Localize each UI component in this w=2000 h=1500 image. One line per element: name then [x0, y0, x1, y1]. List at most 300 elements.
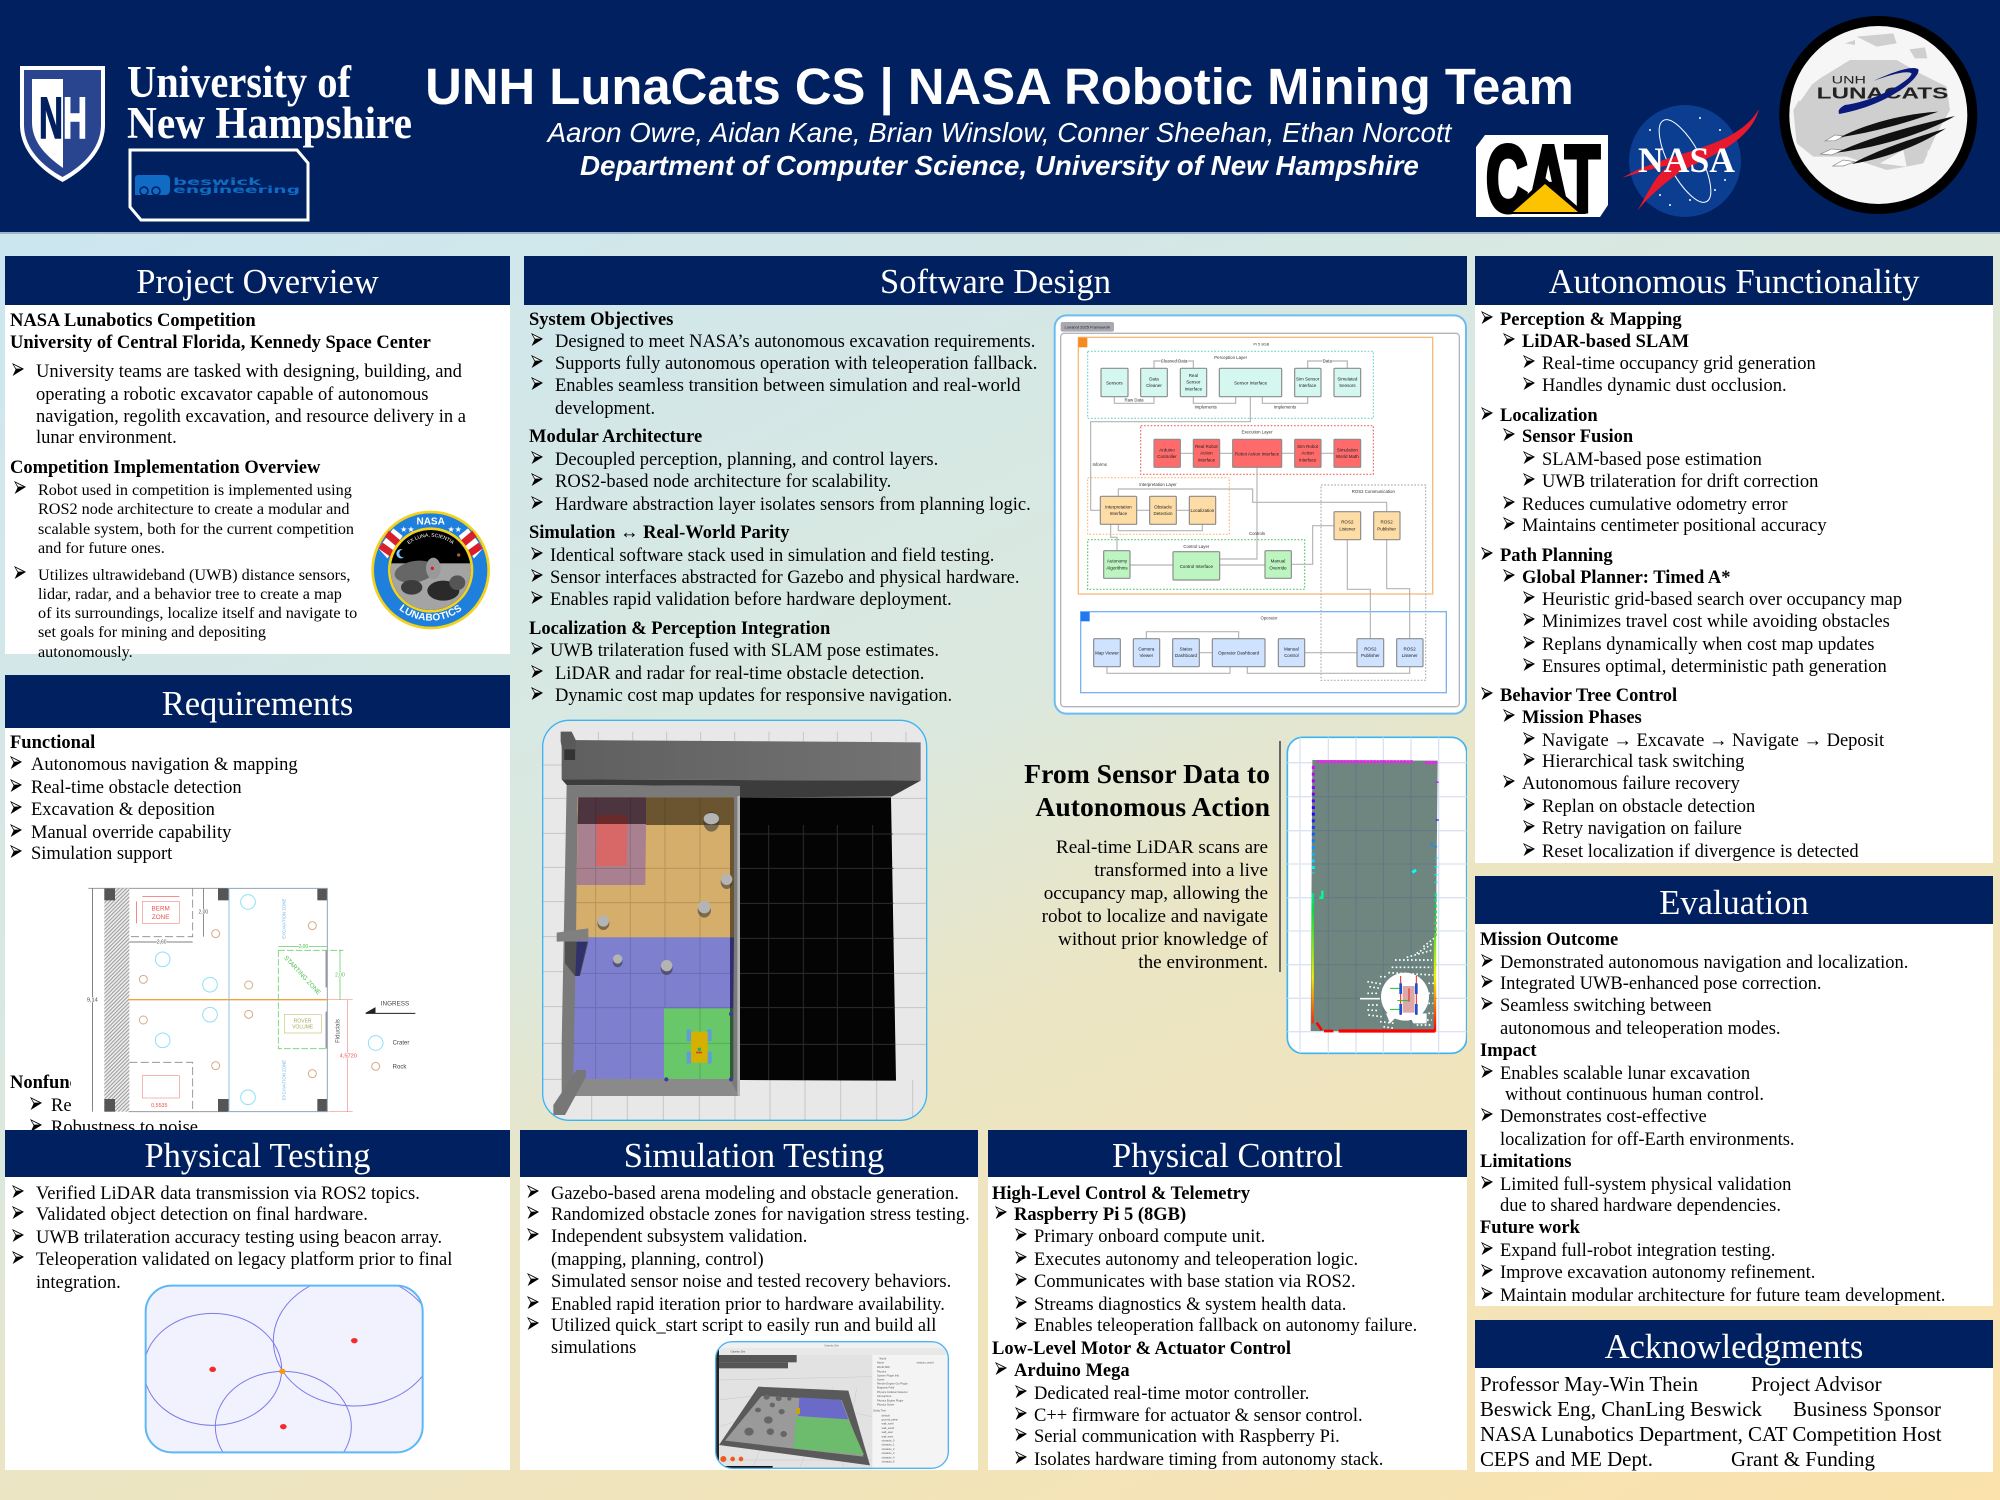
- diagram: software architecture: ROS2: [1381, 520, 1393, 525]
- text: evaluation: Expand full-robot integration testing.: [1500, 1241, 1775, 1261]
- text: autonomous functionality: Sensor Fusion: [1522, 427, 1633, 447]
- diagram: software architecture: Simulated: [1337, 376, 1358, 381]
- callout heading: Autonomous Action: [1035, 791, 1270, 822]
- text: physical control: Primary onboard compute unit.: [1034, 1227, 1265, 1247]
- logo: Beswick Engineering: [130, 150, 308, 220]
- render: Gazebo Sim screenshot: wall_east: [882, 1430, 893, 1434]
- heading: project overview: [5, 256, 510, 305]
- header banner: [0, 0, 2000, 234]
- callout text: the environment.: [1138, 952, 1268, 973]
- text: autonomous functionality: Minimizes travel cost while avoiding obstacles: [1542, 612, 1890, 632]
- heading: acknowledgments: Acknowledgments: [1605, 1328, 1863, 1366]
- text: evaluation: without continuous human control.: [1505, 1085, 1764, 1105]
- diagram: software architecture: Interface: [1299, 383, 1317, 388]
- diagram: software architecture: Lunabot 2025 Framework: [1065, 324, 1110, 329]
- text: evaluation: Demonstrates cost-effective: [1500, 1107, 1707, 1127]
- University of New Hampshire wordmark: University of: [127, 57, 352, 107]
- heading: project overview: Project Overview: [136, 263, 379, 301]
- render: Gazebo Sim screenshot: obstacle_3: [882, 1451, 895, 1455]
- diagram: software architecture: Action: [1301, 451, 1314, 456]
- diagram: software architecture: Control: [1284, 653, 1299, 658]
- text: autonomous functionality: Behavior Tree Control: [1500, 686, 1677, 706]
- diagram: software architecture: Sim Robot: [1297, 444, 1319, 449]
- text: simulation testing: Independent subsystem validation.: [551, 1227, 807, 1247]
- diagram: arena layout: 2,00: [198, 910, 208, 916]
- diagram: software architecture: Simulation: [1337, 447, 1358, 452]
- text: requirements: [10, 733, 298, 1130]
- logo: UNH LunaCats: [1779, 16, 1977, 214]
- render: Gazebo Sim screenshot: Render Engine Gui Plugin: [877, 1382, 908, 1386]
- text: requirements: Autonomous navigation & mapping: [31, 755, 298, 775]
- icon: NASA Lunabotics mission patch: NASA: [416, 517, 445, 528]
- diagram: software architecture: [1054, 314, 1467, 715]
- text: acknowledgments: Project Advisor: [1751, 1372, 1882, 1396]
- text: acknowledgments: Business Sponsor: [1793, 1397, 1941, 1421]
- text: acknowledgments: Professor May-Win Thein: [1480, 1372, 1698, 1396]
- panel: physical testing: [5, 1130, 510, 1470]
- render: Gazebo Sim screenshot: Physics Engine Plugin: [877, 1398, 904, 1402]
- text: requirements: Reliability: [51, 1096, 129, 1116]
- diagram: software architecture: Status: [1180, 646, 1193, 651]
- text: physical control: Executes autonomy and teleoperation logic.: [1034, 1250, 1358, 1270]
- diagram: arena layout: ZONE: [152, 914, 169, 921]
- department: Department of Computer Science, University of New Hampshire: [580, 150, 1419, 181]
- panel: acknowledgments: [1475, 1320, 1993, 1472]
- diagram: arena layout: BERM: [152, 905, 170, 912]
- render: Gazebo Sim screenshot: Physics: [877, 1369, 887, 1373]
- text: physical testing: Verified LiDAR data transmission via ROS2 topics.: [36, 1184, 420, 1204]
- icon: UNH shield: H: [63, 86, 87, 151]
- callout heading: [1024, 758, 1270, 822]
- text: physical control: [992, 1184, 1417, 1470]
- text: software design: Enables seamless transition between simulation and real-world: [555, 376, 1020, 396]
- render: Gazebo Sim screenshot: Gazebo Sim: [824, 1343, 840, 1347]
- callout text: occupancy map, allowing the: [1044, 883, 1268, 904]
- diagram: software architecture: Controls: [1249, 531, 1265, 536]
- icon: UNH shield: N: [39, 86, 63, 151]
- diagram: software architecture: Viewer: [1139, 653, 1154, 658]
- text: physical testing: Teleoperation validated on legacy platform prior to final: [36, 1250, 452, 1270]
- text: simulation testing: Gazebo-based arena modeling and obstacle generation.: [551, 1184, 959, 1204]
- heading: simulation testing: Simulation Testing: [624, 1137, 884, 1175]
- text: autonomous functionality: Maintains centimeter positional accuracy: [1522, 516, 1827, 536]
- diagram: arena layout: 2,00: [298, 944, 308, 950]
- render: Gazebo Sim screenshot: default: [882, 1413, 890, 1417]
- text: software design: Dynamic cost map updates for responsive navigation.: [555, 686, 952, 706]
- diagram: software architecture: Implements: [1274, 405, 1296, 410]
- render: Gazebo Sim screenshot: obstacle_5: [882, 1459, 895, 1463]
- text: software design: Hardware abstraction layer isolates sensors from planning logic.: [555, 495, 1031, 515]
- text: physical control: Dedicated real-time motor controller.: [1034, 1384, 1309, 1404]
- render: Gazebo Sim screenshot: obstacle_0: [882, 1439, 895, 1443]
- text: autonomous functionality: LiDAR-based SLAM: [1522, 332, 1689, 352]
- text: autonomous functionality: Global Planner: Timed A*: [1522, 568, 1730, 588]
- diagram: arena layout: VOLUME: [292, 1025, 314, 1031]
- text: project overview: operating a robotic excavator capable of autonomous: [36, 385, 428, 405]
- diagram: software architecture: Real Robot: [1195, 444, 1218, 449]
- text: evaluation: Maintain modular architecture for future team development.: [1500, 1286, 1945, 1306]
- diagram: arena layout: STARTING ZONE: [282, 955, 322, 997]
- callout text: robot to localize and navigate: [1042, 906, 1268, 927]
- text: evaluation: Impact: [1480, 1041, 1537, 1061]
- callout text: without prior knowledge of: [1058, 929, 1268, 950]
- diagram: arena layout: INGRESS: [381, 1001, 409, 1008]
- diagram: software architecture: Data: [1149, 376, 1159, 381]
- diagram: arena layout: [71, 872, 421, 1115]
- text: autonomous functionality: Reset localization if divergence is detected: [1542, 842, 1859, 862]
- diagram: arena layout: 9,14: [87, 997, 98, 1003]
- diagram: software architecture: Interface: [1198, 458, 1216, 463]
- text: evaluation: Enables scalable lunar excavation: [1500, 1064, 1750, 1084]
- heading: simulation testing: [520, 1130, 978, 1177]
- render: Gazebo Sim screenshot: obstacle_4: [882, 1455, 895, 1459]
- heading: software design: Software Design: [880, 263, 1111, 301]
- diagram: arena layout: EXCAVATION ZONE: [281, 898, 286, 939]
- text: physical control: Serial communication with Raspberry Pi.: [1034, 1427, 1340, 1447]
- heading: evaluation: [1475, 876, 1993, 924]
- text: physical control: Raspberry Pi 5 (8GB): [1014, 1205, 1186, 1225]
- text: software design: development.: [555, 399, 655, 419]
- text: physical testing: [12, 1184, 452, 1293]
- text: project overview: [10, 311, 466, 661]
- text: evaluation: Integrated UWB-enhanced pose correction.: [1500, 974, 1822, 994]
- diagram: arena layout: 4,5720: [340, 1054, 357, 1060]
- text: autonomous functionality: Autonomous failure recovery: [1522, 774, 1740, 794]
- text: software design: Designed to meet NASA’s autonomous excavation requirements.: [555, 332, 1035, 352]
- logo: CAT: CAT: [1486, 126, 1600, 231]
- callout text: Real-time LiDAR scans are: [1056, 837, 1268, 858]
- render: Gazebo Sim screenshot: ground_plane: [882, 1418, 898, 1422]
- icon: UNH shield: [20, 66, 105, 182]
- text: project overview: autonomously.: [38, 643, 133, 661]
- render: Gazebo Sim screenshot: wall_west: [882, 1434, 893, 1438]
- text: autonomous functionality: UWB trilateration for drift correction: [1542, 472, 1818, 492]
- text: autonomous functionality: Retry navigation on failure: [1542, 819, 1742, 839]
- text: physical testing: integration.: [36, 1273, 121, 1293]
- heading: autonomous functionality: [1475, 256, 1993, 305]
- text: software design: Localization & Perception Integration: [529, 619, 830, 639]
- render: Gazebo Sim screenshot: Scene: [877, 1377, 885, 1381]
- text: simulation testing: simulations: [551, 1338, 636, 1358]
- diagram: arena layout: EXCAVATION ZONE: [281, 1060, 286, 1100]
- render: Gazebo Sim screenshot: [715, 1341, 949, 1469]
- diagram: software architecture: Detection: [1153, 511, 1173, 516]
- heading: physical control: Physical Control: [1112, 1137, 1343, 1175]
- diagram: software architecture: Map Viewer: [1095, 650, 1119, 655]
- diagram: software architecture: Obstacle: [1154, 504, 1172, 509]
- render: Gazebo Sim screenshot: System Plugin Info: [877, 1373, 900, 1377]
- render: Gazebo Sim screenshot: World: [879, 1356, 887, 1360]
- text: physical control: Enables teleoperation fallback on autonomy failure.: [1034, 1316, 1417, 1336]
- text: software design: System Objectives: [529, 310, 673, 330]
- text: autonomous functionality: Heuristic grid-based search over occupancy map: [1542, 590, 1902, 610]
- diagram: software architecture: Override: [1269, 565, 1287, 570]
- text: autonomous functionality: Hierarchical task switching: [1542, 752, 1744, 772]
- text: evaluation: localization for off-Earth environments.: [1500, 1130, 1795, 1150]
- diagram: software architecture: Sim Sensor: [1296, 376, 1320, 381]
- text: project overview: lunar environment.: [36, 428, 177, 448]
- diagram: software architecture: Arduino: [1159, 447, 1175, 452]
- text: autonomous functionality: SLAM-based pose estimation: [1542, 450, 1762, 470]
- render: Gazebo Sim screenshot: Magnetic Field: [877, 1386, 895, 1390]
- panel: autonomous functionality: [1475, 256, 1993, 863]
- text: physical control: Arduino Mega: [1014, 1361, 1130, 1381]
- diagram: software architecture: Sensor Interface: [1234, 380, 1268, 385]
- render: Gazebo Sim screenshot: obstacle_1: [882, 1443, 895, 1447]
- text: acknowledgments: Beswick Eng, ChanLing Beswick: [1480, 1397, 1762, 1421]
- diagram: software architecture: Control Layer: [1183, 544, 1210, 549]
- text: simulation testing: Simulated sensor noise and tested recovery behaviors.: [551, 1272, 951, 1292]
- render: Gazebo Sim screenshot: Physics Solver: [877, 1403, 895, 1407]
- diagram: software architecture: Localization: [1190, 508, 1215, 513]
- heading: evaluation: Evaluation: [1659, 884, 1809, 922]
- logo: Beswick Engineering: beswick: [173, 177, 262, 188]
- text: software design: ROS2-based node architecture for scalability.: [555, 472, 891, 492]
- panel: software design: [524, 256, 1467, 1121]
- diagram: software architecture: Autonomy: [1107, 559, 1128, 564]
- diagram: software architecture: Perception Layer: [1214, 355, 1248, 360]
- panel: physical control: [988, 1130, 1467, 1470]
- diagram: software architecture: World Math: [1336, 454, 1359, 459]
- text: physical control: C++ firmware for actuator & sensor control.: [1034, 1406, 1363, 1426]
- panel: project overview: [5, 256, 510, 661]
- text: software design: Modular Architecture: [529, 427, 702, 447]
- text: physical control: Streams diagnostics & system health data.: [1034, 1295, 1346, 1315]
- text: project overview: Robot used in competition is implemented using: [38, 481, 352, 499]
- authors: Aaron Owre, Aidan Kane, Brian Winslow, Conner Sheehan, Ethan Norcott: [548, 117, 1451, 148]
- text: project overview: University teams are tasked with designing, building, and: [36, 362, 462, 382]
- callout text: transformed into a live: [1094, 860, 1268, 881]
- diagram: arena layout: Rock: [393, 1065, 407, 1071]
- text: project overview: scalable system, both for the current competition: [38, 520, 354, 538]
- diagram: software architecture: Listener: [1402, 653, 1418, 658]
- diagram: software architecture: Interface: [1185, 387, 1203, 392]
- render: Gazebo arena top view: [542, 720, 928, 1121]
- text: autonomous functionality: Real-time occupancy grid generation: [1542, 354, 1816, 374]
- callout text: [1042, 837, 1268, 973]
- text: evaluation: [1480, 930, 1945, 1306]
- text: acknowledgments: NASA Lunabotics Department, CAT Competition Host: [1480, 1422, 1942, 1446]
- diagram: software architecture: Camera: [1138, 646, 1155, 651]
- text: physical testing: Validated object detection on final hardware.: [36, 1205, 368, 1225]
- text: evaluation: Limitations: [1480, 1152, 1571, 1172]
- text: autonomous functionality: Replan on obstacle detection: [1542, 797, 1755, 817]
- diagram: software architecture: ROS2: [1404, 646, 1416, 651]
- logo: UNH LunaCats: LUNACATS: [1817, 85, 1948, 102]
- diagram: software architecture: Operator: [1260, 616, 1278, 621]
- diagram: software architecture: Data: [1323, 359, 1332, 364]
- text: evaluation: Seamless switching between: [1500, 996, 1712, 1016]
- render: Gazebo Sim screenshot: wall_south: [882, 1426, 895, 1430]
- diagram: software architecture: Robot Action Interface: [1235, 451, 1280, 456]
- render: Gazebo Sim screenshot: World SDF: [877, 1365, 890, 1369]
- text: project overview: ROS2 node architecture to create a modular and: [38, 500, 349, 518]
- diagram: software architecture: Manual: [1284, 646, 1299, 651]
- diagram: software architecture: Algorithms: [1106, 565, 1128, 570]
- logo: UNH LunaCats: UNH: [1832, 74, 1866, 86]
- title: UNH LunaCats CS | NASA Robotic Mining Team: [425, 58, 1574, 115]
- text: software design: UWB trilateration fused with SLAM pose estimates.: [550, 641, 939, 661]
- diagram: arena layout: Crater: [393, 1041, 409, 1047]
- diagram: software architecture: Dashboard: [1175, 653, 1198, 658]
- text: acknowledgments: Grant & Funding: [1731, 1447, 1875, 1471]
- text: evaluation: Demonstrated autonomous navigation and localization.: [1500, 953, 1908, 973]
- University of New Hampshire wordmark: [127, 57, 412, 148]
- text: autonomous functionality: [1481, 310, 1902, 862]
- text: physical control: High-Level Control & Telemetry: [992, 1184, 1250, 1204]
- text: physical control: Communicates with base station via ROS2.: [1034, 1272, 1356, 1292]
- render: Gazebo Sim screenshot: obstacle_2: [882, 1447, 895, 1451]
- render: Gazebo Sim screenshot: wall_north: [882, 1422, 894, 1426]
- diagram: software architecture: Sensors: [1339, 383, 1356, 388]
- heading: requirements: Requirements: [162, 685, 353, 723]
- text: evaluation: Improve excavation autonomy refinement.: [1500, 1263, 1815, 1283]
- diagram: software architecture: Real: [1189, 373, 1198, 378]
- diagram: software architecture: Pi 5 8GB: [1253, 341, 1270, 346]
- callout: from sensor data to autonomous action: [1024, 758, 1270, 973]
- callout heading: From Sensor Data to: [1024, 758, 1270, 789]
- diagram: software architecture: Sensor: [1186, 380, 1201, 385]
- diagram: software architecture: Interface: [1110, 511, 1128, 516]
- render: Gazebo Sim screenshot: Gazebo Sim: [731, 1349, 746, 1353]
- text: simulation testing: Randomized obstacle zones for navigation stress testing.: [551, 1205, 970, 1225]
- diagram: software architecture: Action: [1200, 451, 1213, 456]
- heading: physical testing: [5, 1130, 510, 1177]
- text: project overview: and for future ones.: [38, 539, 165, 557]
- heading: software design: [524, 256, 1467, 305]
- text: autonomous functionality: Mission Phases: [1522, 708, 1642, 728]
- render: Gazebo Sim screenshot: Name: [877, 1361, 885, 1365]
- diagram: arena layout: 2,60: [157, 940, 167, 946]
- text: acknowledgments: CEPS and ME Dept.: [1480, 1447, 1653, 1471]
- text: acknowledgments: [1480, 1372, 1942, 1471]
- diagram: software architecture: Manual: [1271, 559, 1285, 564]
- text: simulation testing: Enabled rapid iteration prior to hardware availability.: [551, 1295, 945, 1315]
- text: project overview: University of Central Florida, Kennedy Space Center: [10, 333, 431, 353]
- icon: NASA Lunabotics mission patch: EX LUNA, SCIENTIA: [407, 533, 454, 544]
- render: Gazebo Sim screenshot: Atmosphere: [877, 1394, 892, 1398]
- render: Gazebo Sim screenshot: random_world: [917, 1361, 934, 1365]
- text: autonomous functionality: Path Planning: [1500, 546, 1613, 566]
- text: project overview: navigation, regolith excavation, and resource delivery in a: [36, 407, 466, 427]
- text: project overview: of its surroundings, localize itself and navigate to: [38, 604, 357, 622]
- text: autonomous functionality: Localization: [1500, 406, 1598, 426]
- text: requirements: Excavation & deposition: [31, 800, 215, 820]
- text: project overview: Utilizes ultrawideband (UWB) distance sensors,: [38, 566, 350, 584]
- text: requirements: Functional: [10, 733, 95, 753]
- text: project overview: Competition Implementation Overview: [10, 458, 320, 478]
- diagram: software architecture: Implements: [1194, 405, 1217, 410]
- diagram: arena layout: Fiducials: [335, 1019, 341, 1043]
- text: evaluation: Future work: [1480, 1218, 1580, 1238]
- panel: requirements: [5, 675, 510, 1130]
- diagram: software architecture: Publisher: [1377, 527, 1397, 532]
- render: occupancy map: [1286, 736, 1467, 1054]
- text: simulation testing: (mapping, planning, control): [551, 1250, 764, 1270]
- text: project overview: NASA Lunabotics Competition: [10, 311, 256, 331]
- logo: NASA: NASA: [1638, 140, 1735, 180]
- diagram: software architecture: Interpretation Layer: [1139, 482, 1177, 487]
- text: software design: Enables rapid validation before hardware deployment.: [550, 590, 952, 610]
- text: requirements: Manual override capability: [31, 823, 231, 843]
- text: evaluation: due to shared hardware dependencies.: [1500, 1196, 1781, 1216]
- text: autonomous functionality: Ensures optimal, deterministic path generation: [1542, 657, 1887, 677]
- diagram: software architecture: Interface: [1299, 458, 1317, 463]
- icon: NASA Lunabotics mission patch: ★★: [400, 525, 415, 534]
- text: software design: Supports fully autonomous operation with teleoperation fallback.: [555, 354, 1037, 374]
- render: Gazebo Sim screenshot: Physics Collision Detector: [877, 1390, 908, 1394]
- diagram: software architecture: Listener: [1339, 527, 1356, 532]
- text: autonomous functionality: Perception & Mapping: [1500, 310, 1682, 330]
- University of New Hampshire wordmark: New Hampshire: [127, 98, 412, 148]
- text: software design: LiDAR and radar for real-time obstacle detection.: [555, 664, 924, 684]
- icon: NASA Lunabotics mission patch: ★★: [447, 525, 462, 534]
- render: Gazebo Sim screenshot: Entity Tree: [873, 1408, 887, 1412]
- diagram: software architecture: Operator Dashboard: [1218, 650, 1260, 655]
- text: project overview: set goals for mining and depositing: [38, 623, 266, 641]
- text: evaluation: Limited full-system physical validation: [1500, 1175, 1791, 1195]
- text: autonomous functionality: Reduces cumulative odometry error: [1522, 495, 1788, 515]
- heading: physical testing: Physical Testing: [144, 1137, 370, 1175]
- logo: NASA: [1622, 105, 1759, 217]
- panel: evaluation: [1475, 876, 1993, 1306]
- text: project overview: lidar, radar, and a behavior tree to create a map: [38, 585, 342, 603]
- text: software design: Identical software stack used in simulation and field testing.: [550, 546, 994, 566]
- text: requirements: Nonfunctional: [10, 1073, 123, 1093]
- diagram: software architecture: Interpretation: [1105, 504, 1132, 509]
- heading: autonomous functionality: Autonomous Functionality: [1549, 263, 1919, 301]
- text: evaluation: Mission Outcome: [1480, 930, 1618, 950]
- text: physical testing: UWB trilateration accuracy testing using beacon array.: [36, 1228, 442, 1248]
- diagram: software architecture: Publisher: [1361, 653, 1380, 658]
- text: autonomous functionality: Replans dynamically when cost map updates: [1542, 635, 1874, 655]
- diagram: arena layout: 0,5535: [151, 1103, 168, 1109]
- text: requirements: Real-time obstacle detection: [31, 778, 242, 798]
- diagram: UWB trilateration: [144, 1284, 424, 1454]
- text: simulation testing: Utilized quick_start script to easily run and build all: [551, 1316, 936, 1336]
- diagram: arena layout: ROVER: [294, 1018, 312, 1024]
- text: autonomous functionality: Handles dynamic dust occlusion.: [1542, 376, 1787, 396]
- diagram: software architecture: Execution Layer: [1241, 429, 1273, 434]
- logo: CAT: [1476, 126, 1608, 231]
- logo: Beswick Engineering: engineering: [173, 185, 300, 196]
- text: software design: Sensor interfaces abstracted for Gazebo and physical hardware.: [550, 568, 1019, 588]
- icon: NASA Lunabotics mission patch: [371, 510, 490, 630]
- text: autonomous functionality: Navigate → Excavate → Navigate → Deposit: [1542, 731, 1884, 751]
- diagram: arena layout: 2,00: [335, 973, 345, 979]
- heading: physical control: [988, 1130, 1467, 1177]
- diagram: software architecture: Cleaner: [1146, 383, 1162, 388]
- diagram: software architecture: Cleaned Data: [1161, 359, 1188, 364]
- text: software design: [529, 310, 1037, 706]
- diagram: software architecture: ROS2 Communication: [1352, 489, 1395, 494]
- diagram: software architecture: Informs: [1092, 462, 1107, 467]
- text: evaluation: autonomous and teleoperation modes.: [1500, 1019, 1781, 1039]
- diagram: software architecture: Sensors: [1106, 380, 1123, 385]
- diagram: software architecture: ROS2: [1341, 520, 1354, 525]
- diagram: software architecture: ROS2: [1364, 646, 1377, 651]
- panel: simulation testing: [520, 1130, 978, 1470]
- text: software design: Simulation ↔ Real-World Parity: [529, 523, 790, 543]
- diagram: software architecture: Control Interface: [1180, 564, 1213, 569]
- text: requirements: Simulation support: [31, 844, 172, 864]
- heading: acknowledgments: [1475, 1320, 1993, 1368]
- heading: requirements: [5, 675, 510, 728]
- icon: NASA Lunabotics mission patch: LUNABOTICS: [399, 604, 462, 621]
- text: physical control: Low-Level Motor & Actuator Control: [992, 1339, 1291, 1359]
- diagram: software architecture: Controller: [1157, 454, 1177, 459]
- text: simulation testing: [527, 1184, 970, 1358]
